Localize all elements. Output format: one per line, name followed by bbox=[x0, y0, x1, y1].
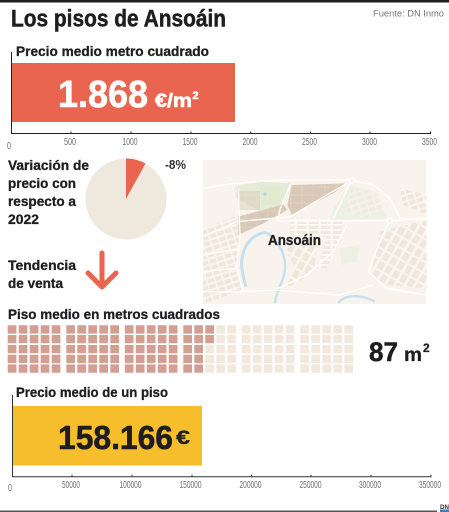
axis labels bbox=[7, 137, 437, 152]
axis labels: 0 bbox=[8, 483, 12, 494]
icon: down arrow bbox=[88, 253, 116, 287]
map label: Ansoáin bbox=[268, 232, 321, 249]
axis labels: 100000 bbox=[120, 480, 142, 491]
axis labels: 0 bbox=[7, 141, 11, 152]
chart: average flat price bbox=[8, 384, 441, 494]
axis labels bbox=[8, 480, 441, 494]
bar: 1868 bbox=[12, 63, 235, 122]
top rule bbox=[0, 0, 449, 2]
value: 1.868 €/m2: €/m bbox=[155, 91, 192, 112]
axis labels: 300000 bbox=[359, 480, 381, 491]
heading: price per square metre: Precio medio metro cuadrado bbox=[16, 43, 209, 59]
title: Los pisos de Ansoáin bbox=[11, 6, 226, 32]
axis labels: 3000 bbox=[362, 137, 377, 148]
axis labels: 3500 bbox=[422, 137, 437, 148]
axis labels: 1500 bbox=[182, 137, 198, 148]
heading: price variation bbox=[8, 157, 89, 227]
value: 1.868 €/m2: 1.868 bbox=[58, 74, 148, 116]
value: 87 m2 bbox=[369, 337, 430, 367]
axis labels: 150000 bbox=[180, 480, 202, 491]
axis labels: 2000 bbox=[242, 137, 258, 148]
axis labels: 500 bbox=[64, 137, 76, 148]
pie value: -8% bbox=[165, 158, 186, 172]
axis labels: 1000 bbox=[122, 137, 138, 148]
value: 87 m2: 87 bbox=[369, 337, 398, 367]
heading: sales trend: de venta bbox=[8, 275, 63, 291]
value: 1.868 €/m2: 2 bbox=[192, 90, 199, 102]
axis bbox=[12, 395, 432, 477]
heading: sales trend bbox=[8, 257, 76, 291]
axis labels: 2500 bbox=[302, 137, 317, 148]
waffle chart: 87 of 150 bbox=[8, 325, 353, 373]
waffle: filled cells bbox=[8, 325, 214, 373]
heading: average flat size: Piso medio en metros cuadrados bbox=[8, 306, 220, 322]
heading: average flat price: Precio medio de un piso bbox=[16, 384, 168, 400]
heading: price variation: Variación de bbox=[8, 157, 89, 173]
waffle: base cells bbox=[205, 325, 353, 373]
pie chart: -8% bbox=[86, 158, 166, 240]
value: 87 m2: m bbox=[404, 345, 422, 366]
heading: price variation: 2022 bbox=[8, 211, 39, 227]
heading: sales trend: Tendencia bbox=[8, 257, 76, 273]
value: 87 m2: 2 bbox=[423, 341, 430, 355]
axis bbox=[12, 52, 431, 134]
value: 158.166 €: € bbox=[176, 428, 191, 449]
value: 158.166 €: 158.166 bbox=[58, 419, 173, 456]
heading: price variation: respecto a bbox=[8, 193, 76, 209]
source note: Fuente: DN Inmo bbox=[373, 8, 444, 20]
bar: 158166 bbox=[12, 406, 202, 466]
heading: price variation: precio con bbox=[8, 175, 76, 191]
chart: price per square metre bbox=[7, 43, 437, 152]
value: 1.868 €/m2 bbox=[58, 74, 199, 116]
map: Ansoáin bbox=[203, 160, 427, 304]
axis labels: 200000 bbox=[240, 480, 262, 491]
axis labels: 50000 bbox=[62, 480, 80, 491]
bottom rule bbox=[0, 510, 437, 512]
axis labels: 250000 bbox=[300, 480, 322, 491]
